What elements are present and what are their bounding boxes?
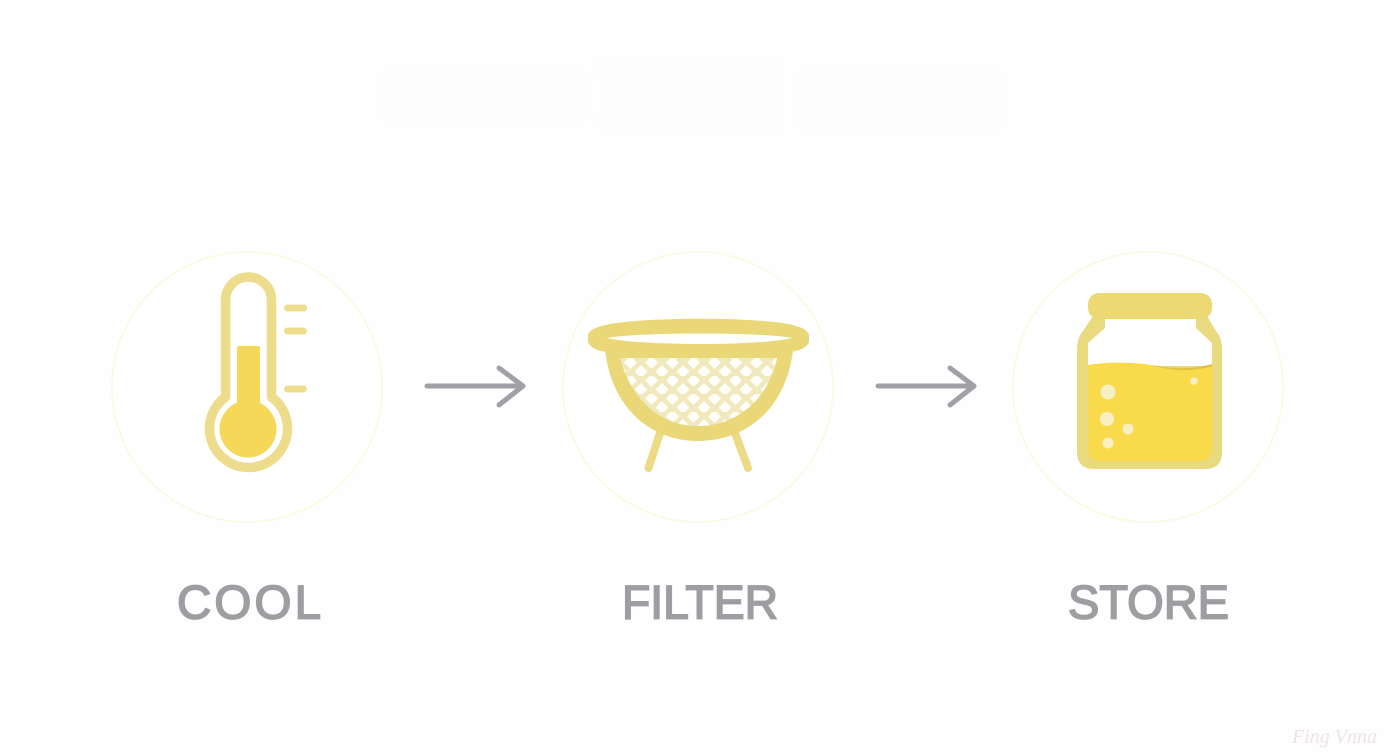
faded title ghost: [385, 60, 1000, 130]
panel: cool: [112, 252, 382, 630]
icon: thermometer: [209, 277, 307, 467]
icon: jar: [1077, 293, 1222, 469]
label: cool: COOL: [177, 576, 321, 630]
label: filter: FILTER: [622, 576, 778, 630]
panel: store: [1013, 252, 1283, 630]
step circle: store: [1013, 252, 1283, 522]
signature watermark: Fing Vnna: [1291, 726, 1377, 748]
arrow: cool to filter: [427, 368, 523, 405]
label: store: STORE: [1068, 576, 1229, 630]
panel: filter: [563, 252, 833, 630]
arrow: filter to store: [878, 368, 974, 405]
step circle: filter: [563, 252, 833, 522]
icon: colander: [588, 319, 809, 468]
step circle: cool: [112, 252, 382, 522]
